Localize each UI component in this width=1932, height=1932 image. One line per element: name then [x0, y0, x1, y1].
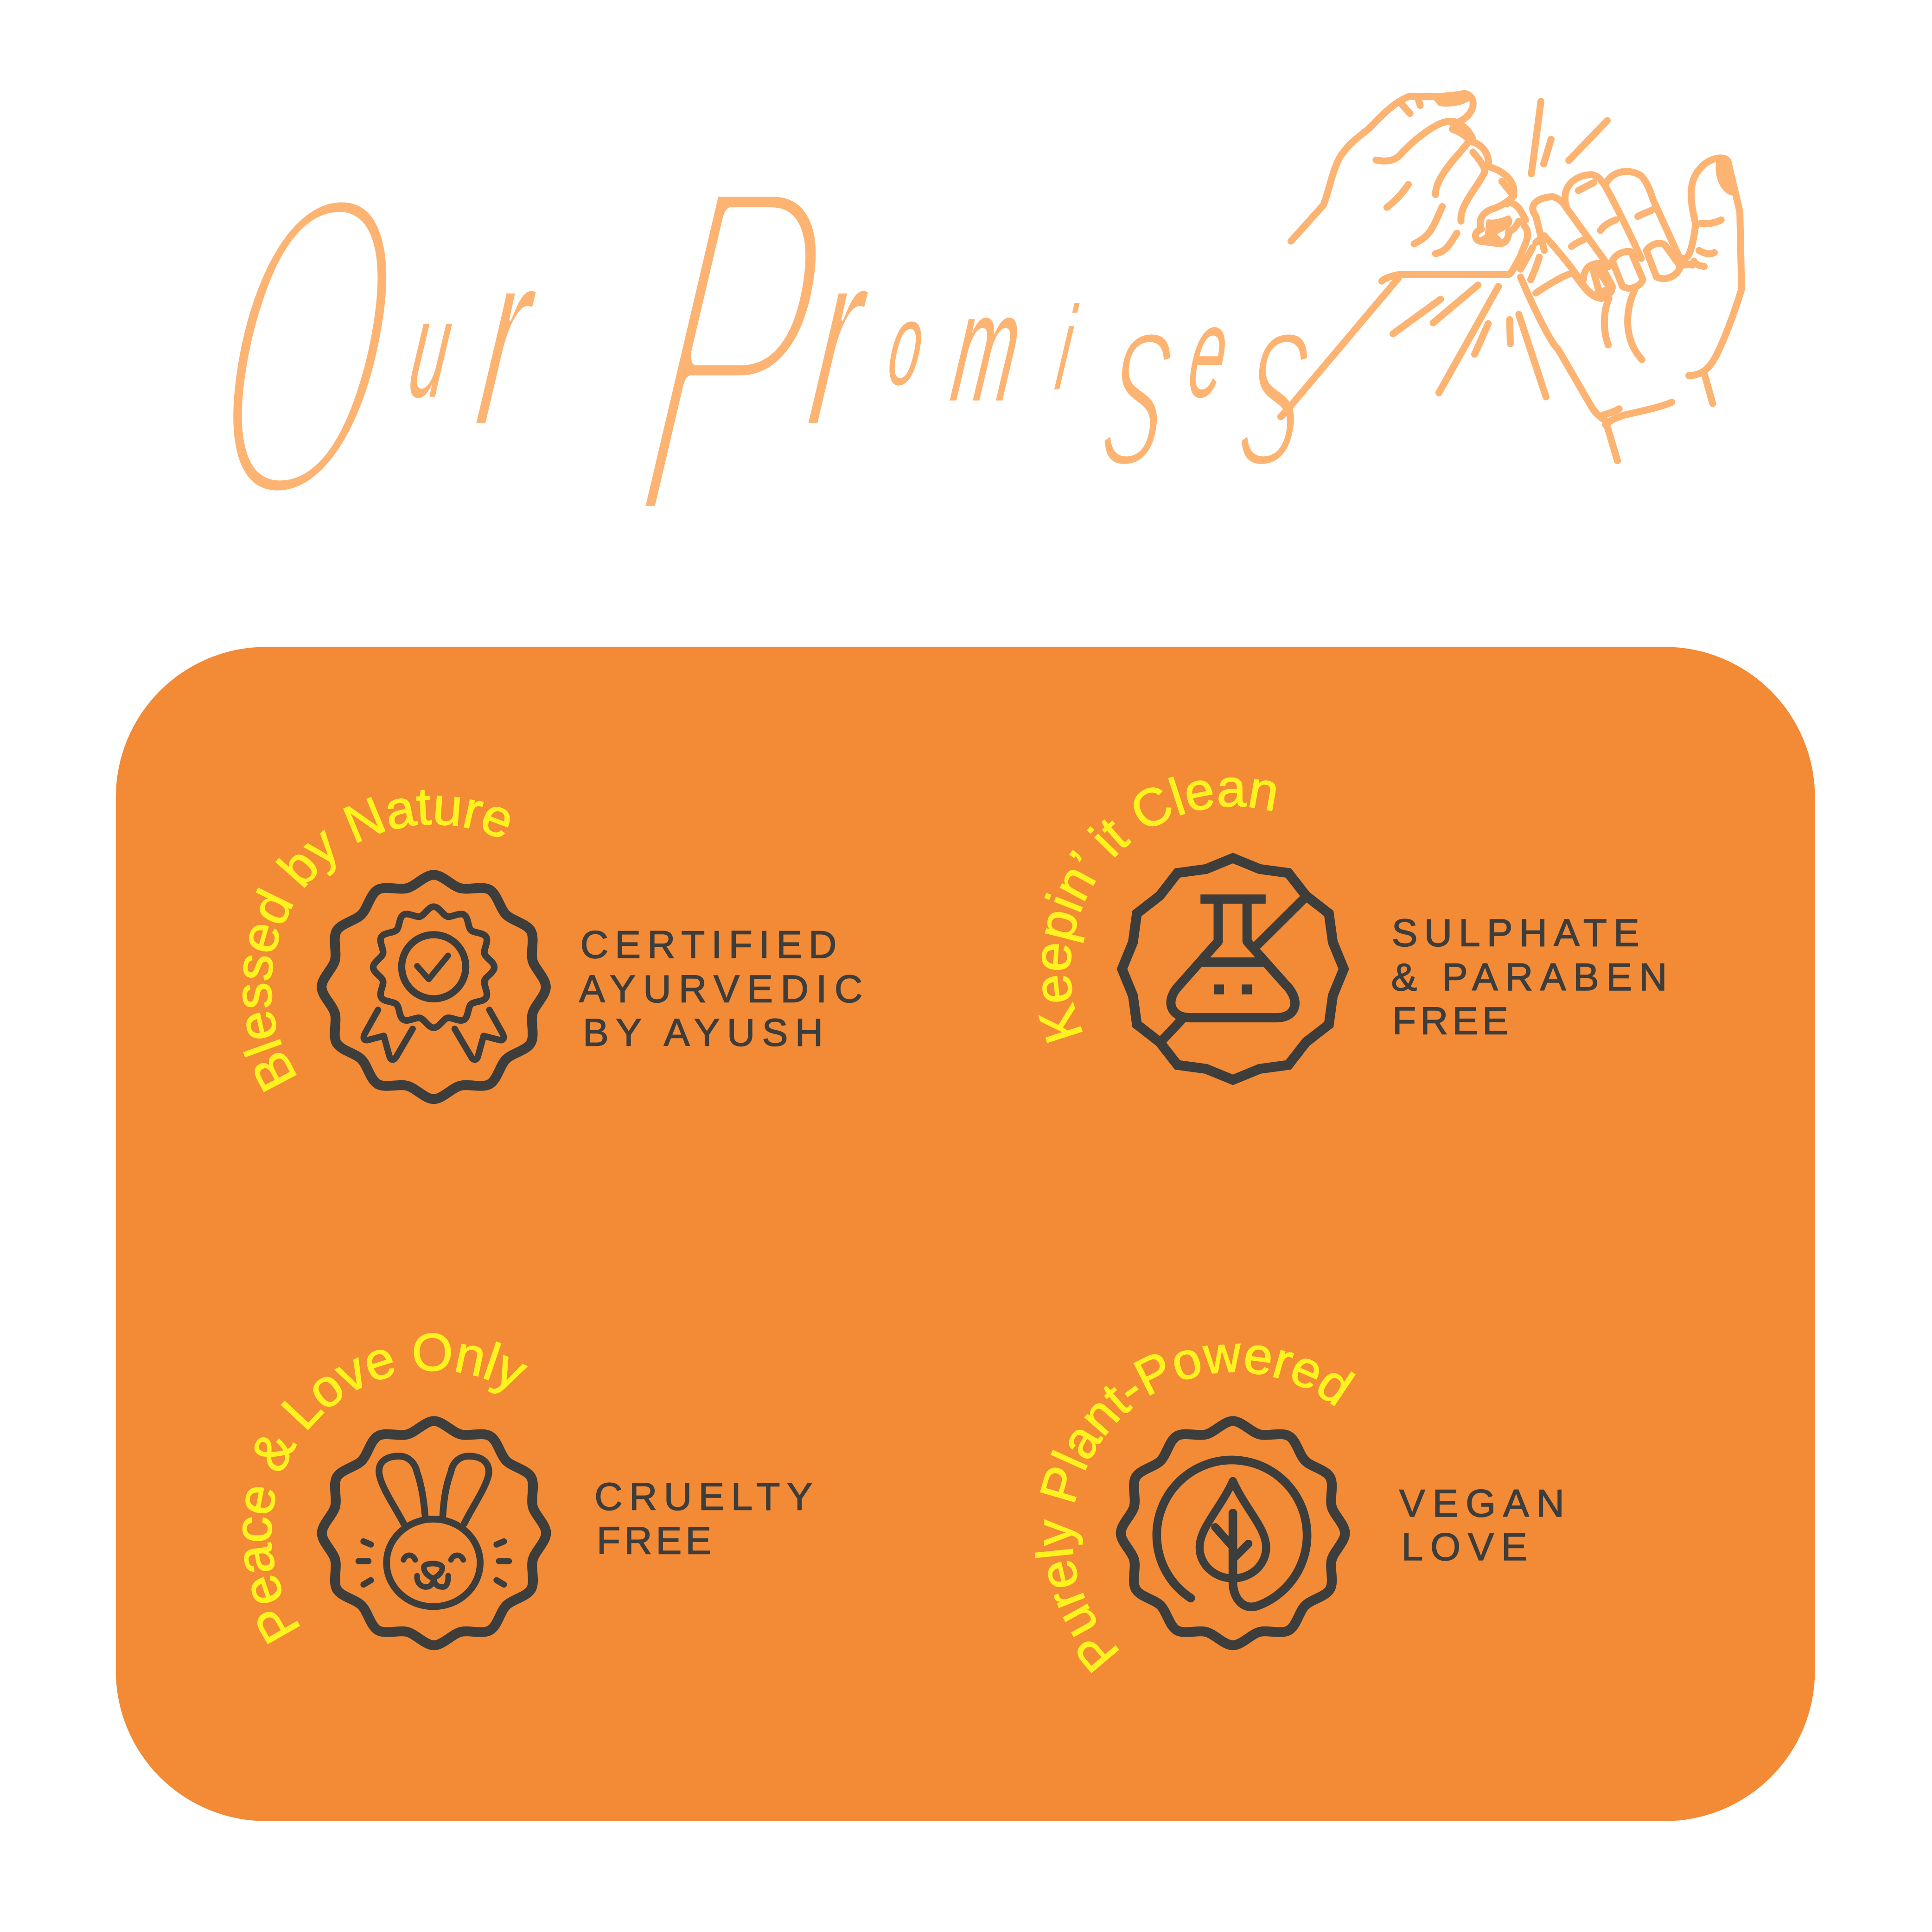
icon: certified rosette — [322, 875, 546, 1099]
title: Our Promises: e — [1181, 280, 1237, 424]
title: Our Promises: r — [797, 197, 883, 479]
label: certified ayurvedic by ayush: AYURVEDIC — [579, 967, 862, 1010]
curved heading: Purely Plant-Powered: Purely Plant-Powered — [1025, 1324, 1363, 1683]
title: Our Promises: m — [944, 261, 1031, 433]
label: vegan love: VEGAN — [1399, 1481, 1564, 1525]
title: Our Promises: s — [1090, 237, 1192, 519]
title: Our Promises: o — [881, 279, 931, 409]
promise: cruelty free — [224, 1323, 813, 1653]
label: sulphate and paraben free: FREE — [1392, 999, 1508, 1043]
label: sulphate and paraben free: & PARABEN — [1391, 955, 1667, 999]
promise: certified ayurvedic — [223, 777, 862, 1101]
label: cruelty free — [594, 1475, 813, 1562]
title: Our Promises: P — [614, 78, 851, 622]
title: Our Promises: r — [465, 197, 551, 479]
label: cruelty free: CRUELTY — [594, 1475, 813, 1518]
curved heading: Keepin' it Clean: Keepin’ it Clean — [1022, 759, 1283, 1050]
panel: orange promises card — [116, 647, 1815, 1821]
curved heading: Blessed by Nature: Blessed by Nature — [223, 777, 522, 1101]
icon: leaf spiral — [1121, 1421, 1345, 1645]
title: Our Promises: s — [1228, 237, 1329, 519]
label: vegan love — [1399, 1481, 1564, 1569]
label: certified ayurvedic by ayush: BY AYUSH — [583, 1011, 823, 1054]
label: cruelty free: FREE — [597, 1518, 711, 1562]
title: Our Promises — [185, 78, 1352, 622]
title: Our Promises: u — [402, 272, 461, 427]
title: Our Promises: O — [189, 99, 425, 591]
promise: sulphate and paraben free — [1022, 759, 1667, 1080]
label: sulphate and paraben free: SULPHATE — [1392, 911, 1639, 954]
icon: bunny — [322, 1421, 546, 1645]
title: Our Promises: i — [1050, 282, 1083, 415]
label: sulphate and paraben free — [1391, 911, 1667, 1043]
icon: crossed-out flask — [1122, 858, 1344, 1080]
curved heading: Peace & Love Only: Peace & Love Only — [224, 1323, 536, 1653]
promise: vegan love — [1025, 1324, 1564, 1683]
illustration: hands applying cream — [1281, 94, 1741, 461]
label: certified ayurvedic by ayush — [579, 923, 862, 1054]
label: certified ayurvedic by ayush: CERTIFIED — [580, 923, 836, 966]
label: vegan love: LOVE — [1402, 1525, 1527, 1569]
